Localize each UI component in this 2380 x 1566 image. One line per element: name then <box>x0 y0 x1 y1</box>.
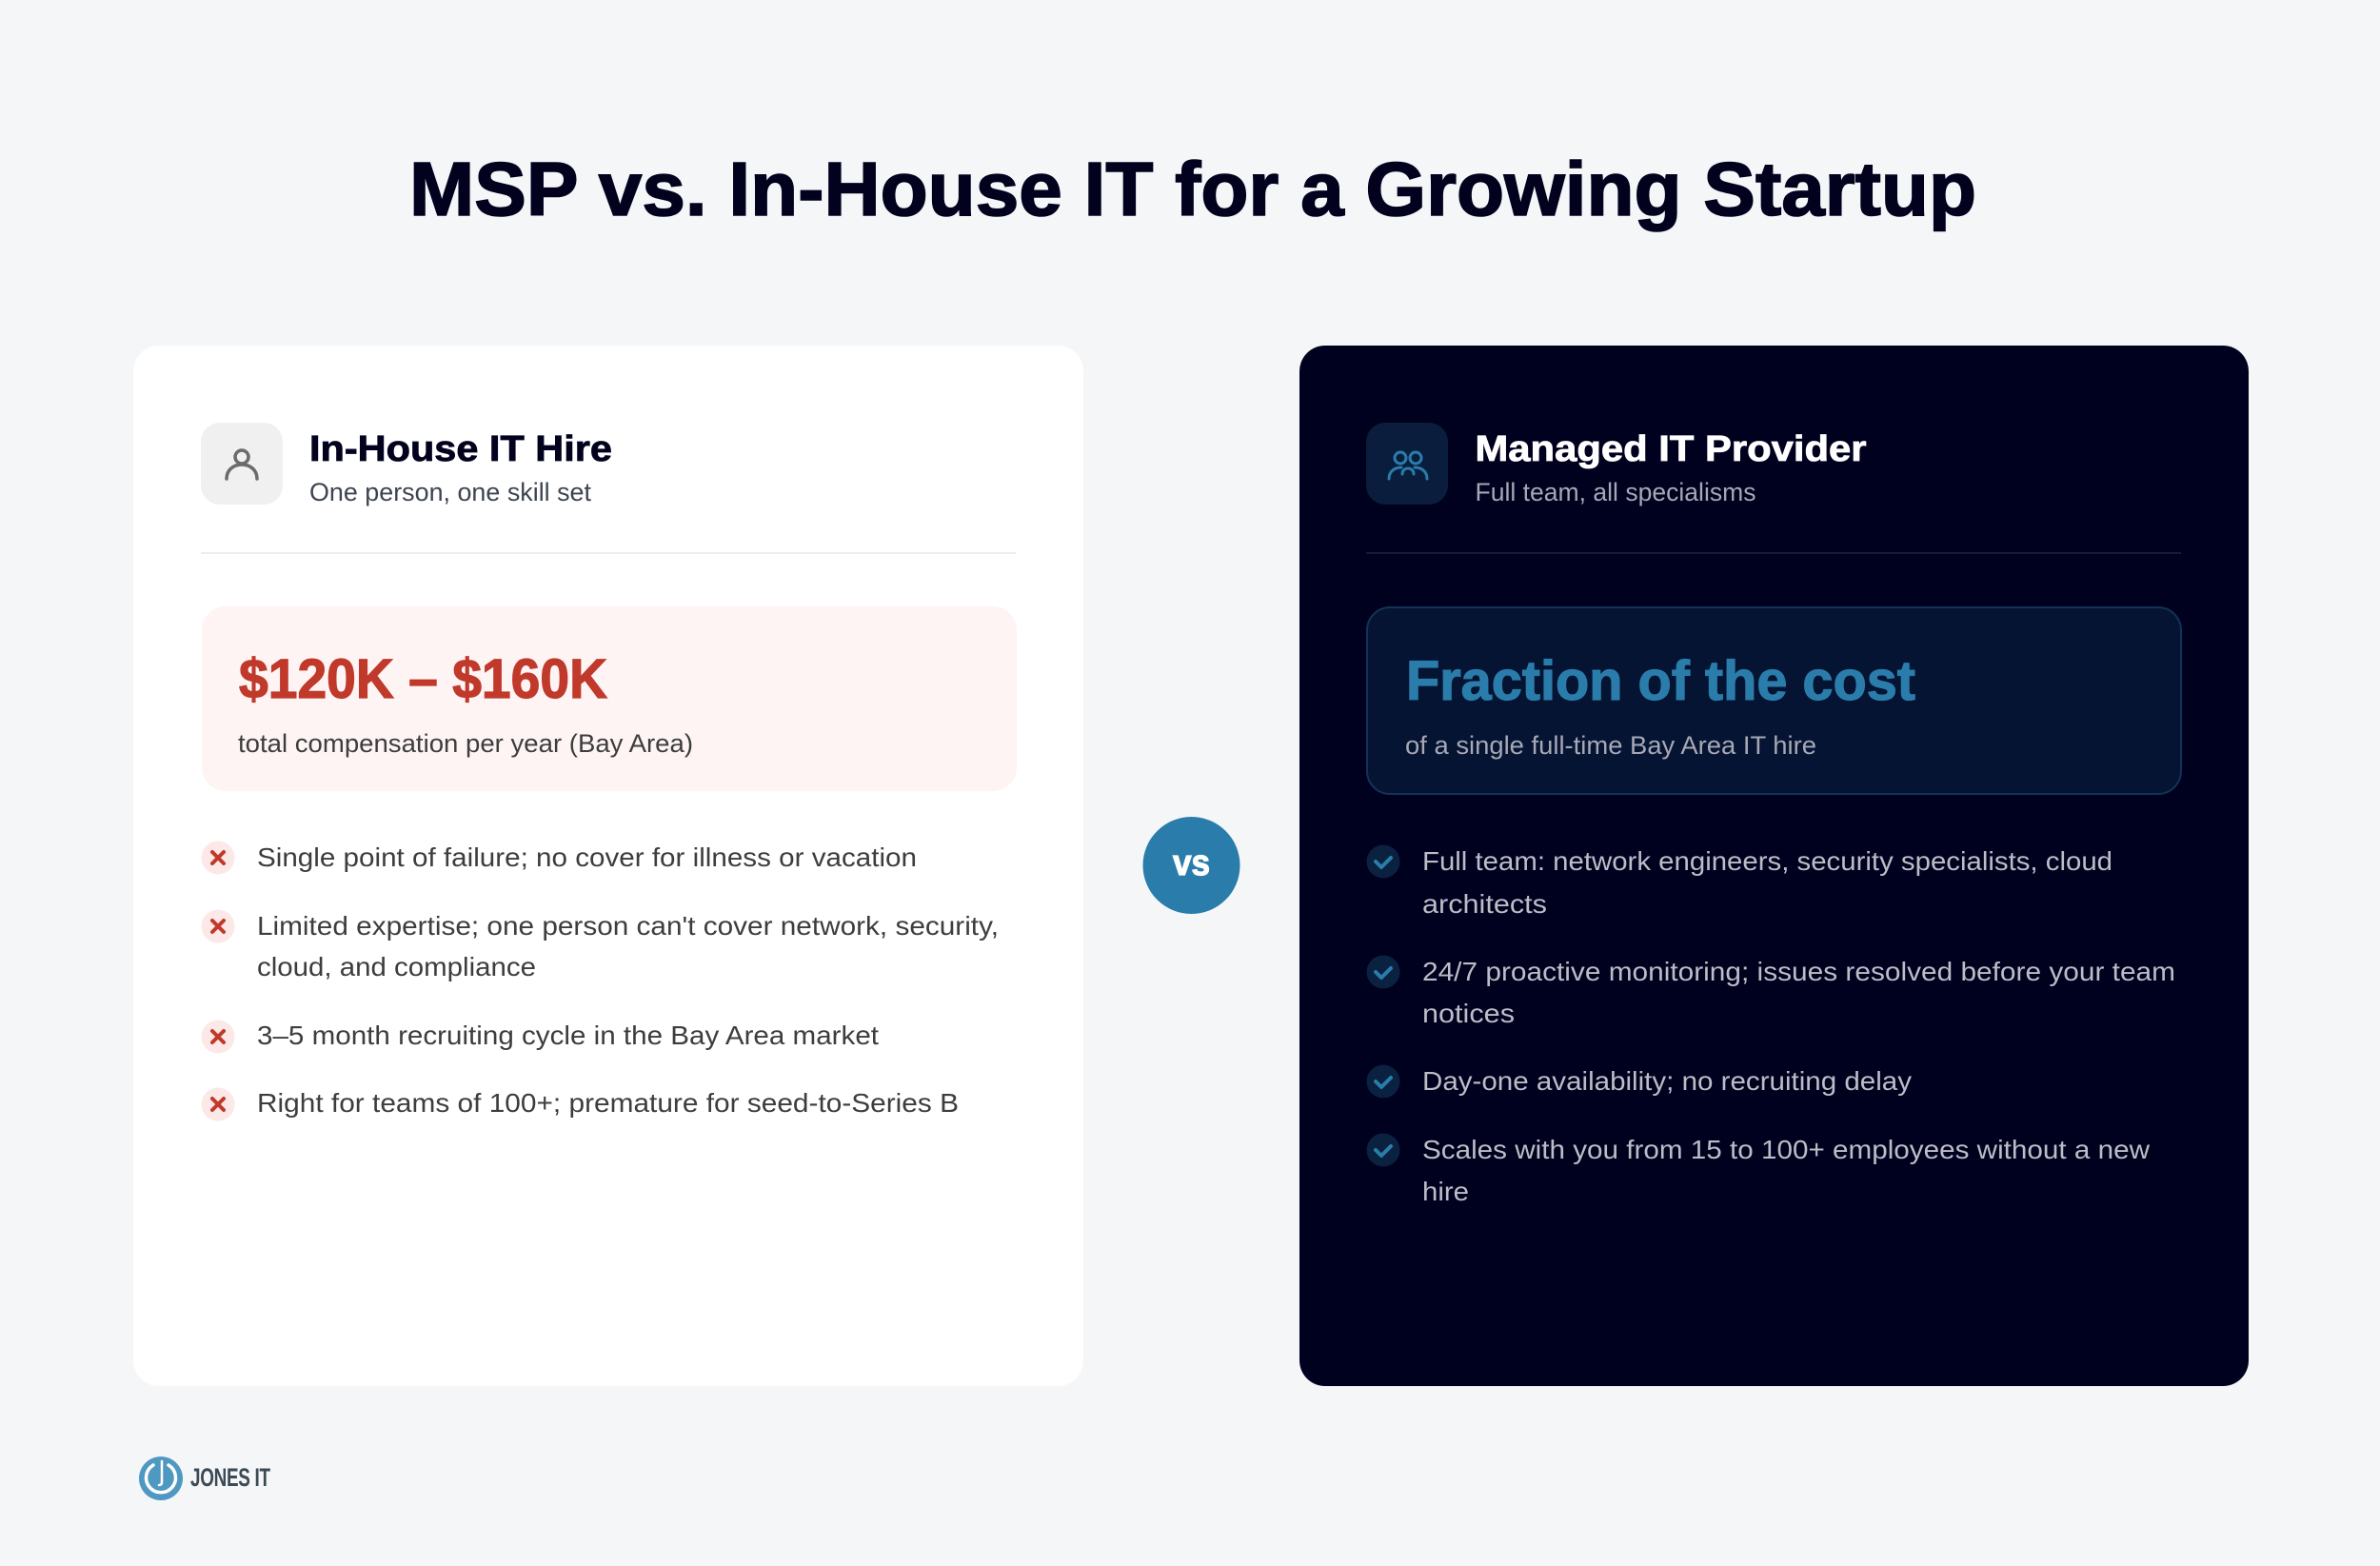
item: full team <box>1367 845 2112 919</box>
price caption: total compensation per year (Bay Area) <box>238 729 693 758</box>
cost box: in-house <box>202 606 1017 791</box>
price: $120K – $160K <box>239 648 607 710</box>
panel: in-house IT hire <box>133 346 1083 1386</box>
cost box: managed <box>1367 607 2181 794</box>
item: single point of failure: Single point of failure; no cover for illness or vacation <box>257 842 917 872</box>
item: limited expertise: cloud, and compliance <box>257 952 536 981</box>
item: proactive monitoring <box>1367 956 2175 1028</box>
item: right for teams of 100+: Right for teams of 100+; premature for seed-to-Series B <box>257 1088 959 1118</box>
list: in-house drawbacks <box>202 842 999 1121</box>
item: scales with you: hire <box>1422 1177 1469 1206</box>
icon: team <box>1366 423 1448 505</box>
list: managed benefits <box>1367 845 2175 1206</box>
logo: Jones IT: JONES IT <box>190 1463 270 1492</box>
cost headline: Fraction of the cost <box>1406 650 1915 712</box>
logo: Jones IT <box>139 1457 270 1500</box>
heading: managed: Managed IT Provider <box>1476 429 1867 469</box>
item: recruiting cycle: 3–5 month recruiting cycle in the Bay Area market <box>257 1021 879 1050</box>
item: day-one availability: Day-one availability; no recruiting delay <box>1422 1066 1912 1096</box>
item: proactive monitoring: 24/7 proactive monitoring; issues resolved before your team <box>1422 957 2175 986</box>
icon: person <box>201 423 283 505</box>
panel: managed IT provider <box>1299 346 2249 1386</box>
title: MSP vs. In-House IT for a Growing Startup <box>409 147 1976 231</box>
cost caption: of a single full-time Bay Area IT hire <box>1405 731 1816 760</box>
badge: vs <box>1142 817 1240 914</box>
subheading: managed: Full team, all specialisms <box>1476 478 1755 506</box>
item: full team: Full team: network engineers, security specialists, cloud <box>1422 846 2112 876</box>
item: scales with you <box>1367 1133 2151 1206</box>
item: scales with you: Scales with you from 15 to 100+ employees without a new <box>1422 1135 2151 1164</box>
subheading: in-house: One person, one skill set <box>309 478 591 506</box>
item: limited expertise: Limited expertise; one person can't cover network, security, <box>257 911 999 941</box>
item: limited expertise <box>202 910 999 981</box>
heading: in-house: In-House IT Hire <box>309 429 612 469</box>
item: proactive monitoring: notices <box>1422 999 1515 1028</box>
item: full team: architects <box>1422 889 1547 919</box>
badge: vs: vs <box>1173 843 1210 883</box>
